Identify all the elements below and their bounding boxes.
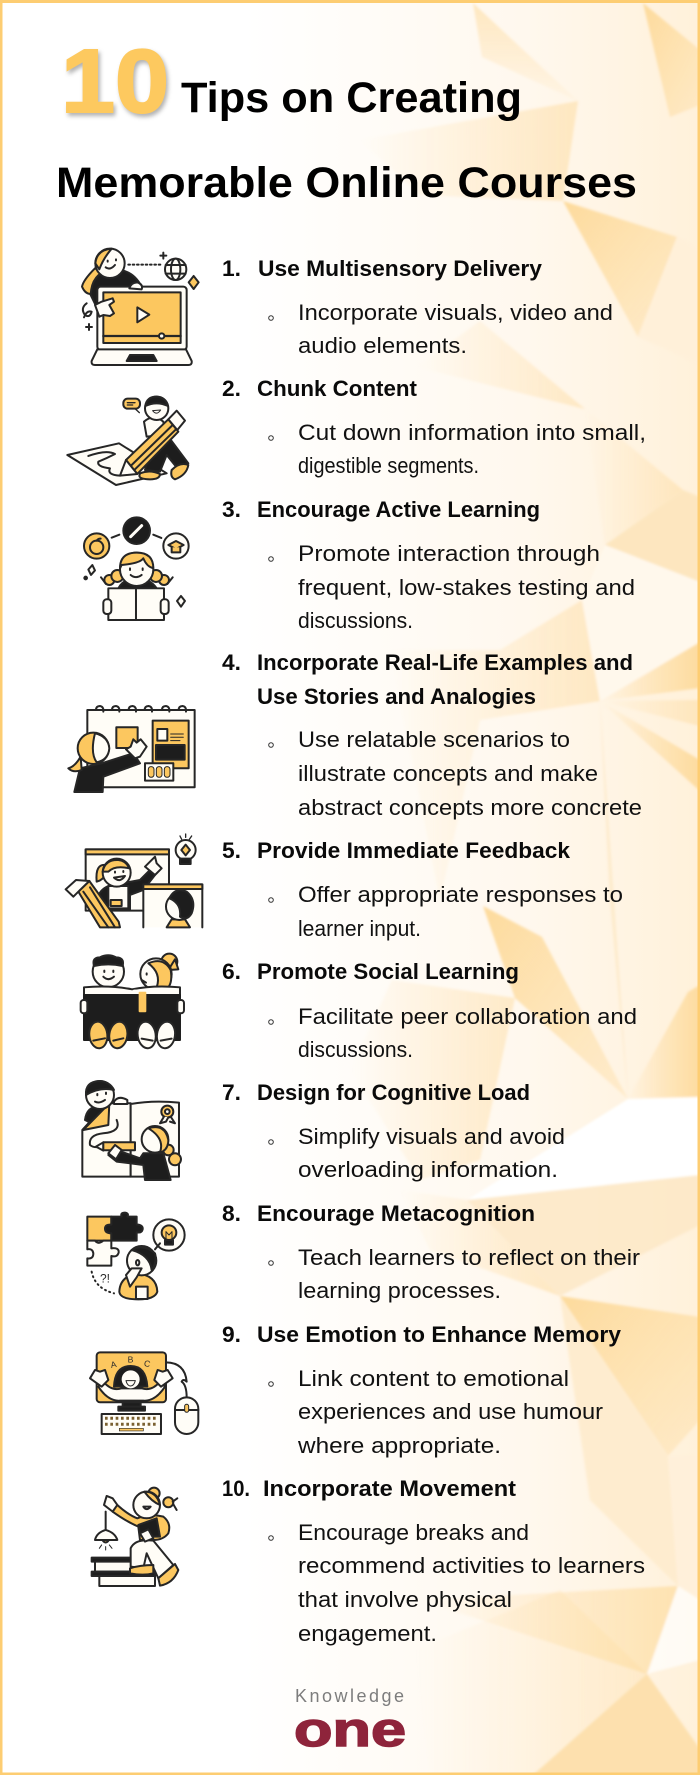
tip 7 — [222, 1080, 565, 1182]
title: Tips on Creating — [181, 74, 522, 122]
tip 9: where appropriate. — [297, 1433, 501, 1458]
icon: puzzle pieces and thinking person — [87, 1213, 185, 1299]
tip 6: Facilitate peer collaboration and — [298, 1004, 637, 1029]
tip 5: Provide Immediate Feedback — [257, 838, 571, 863]
tip 7: overloading information. — [298, 1157, 558, 1182]
tip 1: Use Multisensory Delivery — [258, 256, 543, 281]
tip 3: discussions. — [298, 608, 413, 633]
tip 3: frequent, low-stakes testing and — [298, 575, 635, 600]
tip 6 — [222, 959, 637, 1062]
icon: two children reading a book — [81, 954, 184, 1049]
tip 8 — [222, 1201, 640, 1303]
icon: person at planning board — [68, 706, 195, 792]
tip 2: 2. — [222, 376, 241, 401]
tip 8: learning processes. — [298, 1278, 501, 1303]
icon: person in computer with keyboard and mouse: B — [128, 1354, 134, 1364]
tip 10: engagement. — [298, 1621, 437, 1646]
tip 10: Incorporate Movement — [263, 1476, 517, 1501]
tip 4: 4. — [222, 650, 241, 675]
tip 2 — [222, 376, 646, 478]
icon: teacher with video panels — [66, 834, 202, 927]
tip 10 — [222, 1476, 645, 1646]
tip 10: recommend activities to learners — [298, 1553, 645, 1578]
tip 5: 5. — [222, 838, 241, 863]
tip 1: audio elements. — [298, 333, 467, 358]
tip 8: Encourage Metacognition — [257, 1201, 535, 1226]
title — [56, 32, 637, 207]
logo: Knowledge One: one — [294, 1704, 406, 1757]
tip 10: that involve physical — [298, 1587, 512, 1612]
tip 1: 1. — [222, 256, 241, 281]
tip 4: illustrate concepts and make — [298, 761, 598, 786]
tip 7: Simplify visuals and avoid — [298, 1124, 565, 1149]
tip 4: Incorporate Real-Life Examples and — [257, 650, 633, 675]
tip 10: Encourage breaks and — [298, 1520, 529, 1545]
tip 2: digestible segments. — [298, 453, 479, 478]
tip 5: Offer appropriate responses to — [298, 882, 623, 907]
tip 4 — [222, 650, 642, 820]
tip 7: Design for Cognitive Load — [257, 1080, 530, 1105]
icon: puzzle pieces and thinking person: ?! — [100, 1272, 110, 1286]
tip 6: Promote Social Learning — [257, 959, 519, 984]
tip 3: 3. — [222, 497, 241, 522]
tip 9: 9. — [222, 1322, 241, 1347]
tip 4: Use relatable scenarios to — [298, 727, 570, 752]
tip 8: 8. — [222, 1201, 241, 1226]
tip 1: Incorporate visuals, video and — [298, 300, 613, 325]
icon: open book with drawing children — [82, 1081, 181, 1180]
tip 3: Encourage Active Learning — [257, 497, 540, 522]
tip 10: 10. — [222, 1476, 250, 1501]
icon: girl reading with learning symbols — [84, 517, 189, 620]
tip 2: Cut down information into small, — [298, 420, 646, 445]
logo: Knowledge One: Knowledge — [295, 1686, 404, 1706]
tip 8: Teach learners to reflect on their — [298, 1245, 640, 1270]
tip 7: 7. — [222, 1080, 241, 1105]
icon: person writing with giant pencil — [67, 397, 188, 485]
icon: person in computer with keyboard and mouse: A — [110, 1359, 118, 1370]
tip 6: 6. — [222, 959, 241, 984]
tip 4: Use Stories and Analogies — [257, 684, 536, 709]
tip 9: Use Emotion to Enhance Memory — [257, 1322, 622, 1347]
tip 5 — [222, 838, 623, 941]
tip 3 — [222, 497, 635, 633]
icon: person in computer with keyboard and mouse: C — [143, 1358, 151, 1369]
tip 9: Link content to emotional — [298, 1366, 569, 1391]
tip 4: abstract concepts more concrete — [298, 795, 642, 820]
tip 6: discussions. — [298, 1037, 413, 1062]
tip 9 — [222, 1322, 622, 1458]
icon: laptop with video — [82, 249, 199, 365]
tip 5: learner input. — [298, 916, 421, 941]
title number: 10: 10 — [61, 32, 169, 132]
tip 1 — [222, 256, 613, 358]
logo: Knowledge One — [294, 1686, 406, 1757]
icon: girl sitting on books under a lamp — [92, 1488, 178, 1586]
icon: person in computer with keyboard and mouse — [90, 1352, 198, 1434]
tip 9: experiences and use humour — [298, 1399, 603, 1424]
title: Memorable Online Courses — [56, 159, 637, 207]
tip 2: Chunk Content — [257, 376, 418, 401]
tip 3: Promote interaction through — [298, 541, 600, 566]
